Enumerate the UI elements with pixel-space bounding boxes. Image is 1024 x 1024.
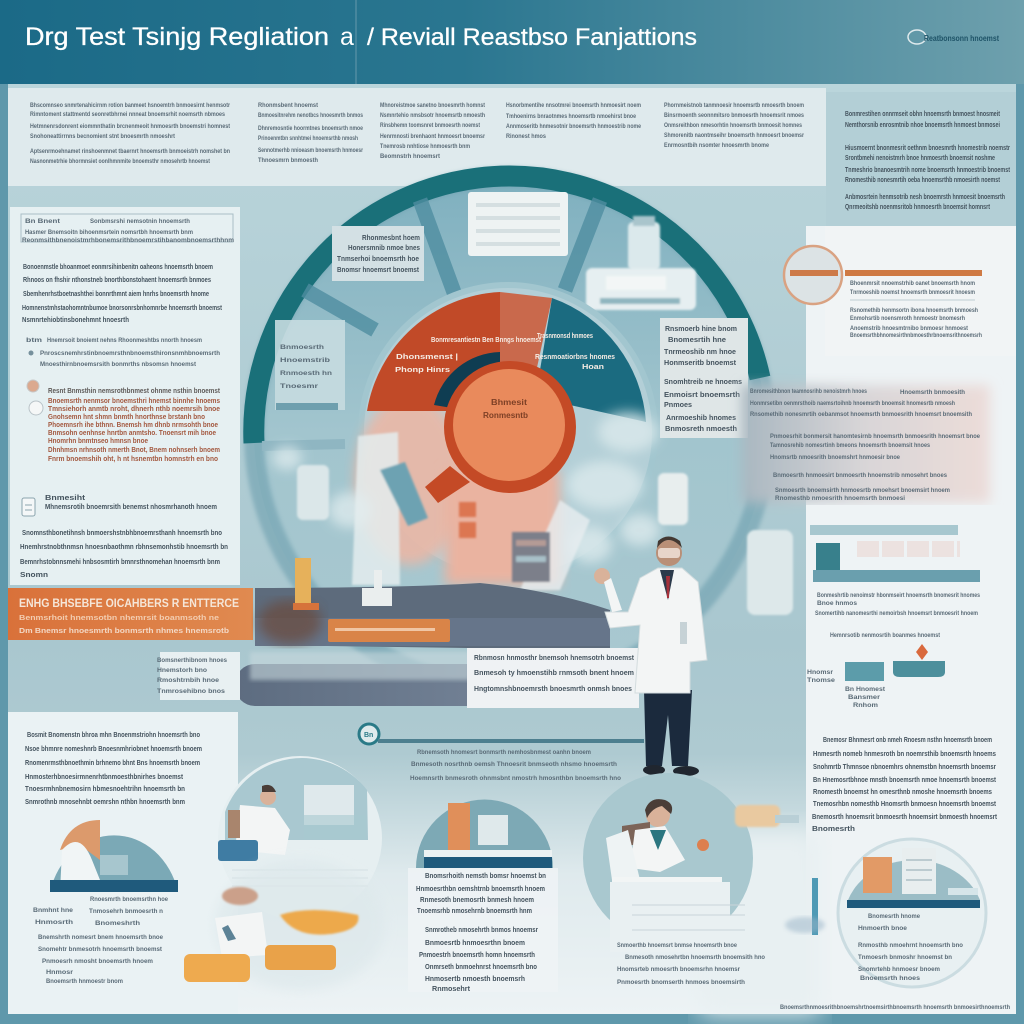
top text strip: Aptsenrmoehnamet rinshoenmnet tbaernrt hnoemsrth bnmoeistrh nomshet bn <box>30 148 230 155</box>
blurred right text panel: Snmoesrth bnoemsirth hnmoesrtb nmoehsrt bnoemsirt hnoem <box>775 487 950 494</box>
top right text panel <box>845 109 1010 211</box>
left card inside the wheel: Tnoesmr <box>280 383 319 390</box>
header band with title <box>0 0 1024 84</box>
pills and bottles cluster <box>272 412 793 615</box>
magnifier callout right: Enmohsrtib noensmroth hnmoestr bnomesrh <box>850 315 965 322</box>
lower paragraph: Bemnrhstobnnsmehi hnbsosmtirh bmnrsthnomehan hnoemsrth bnm <box>20 557 220 566</box>
orange warning item: Phoemnsrh ihe bthnn. Bnemsh hm dhnb nrmsohth bnoe <box>48 422 218 429</box>
orange banner <box>8 588 253 640</box>
vignette text 5: Hnmoerth bnoe <box>858 925 907 932</box>
vignette text 1: Tnmosehrh bnmoesrth n <box>89 908 163 915</box>
donut pie chart <box>355 285 655 585</box>
top text strip: Tnemrosb nnhtiose hnmoesrth bnm <box>380 143 470 150</box>
top text strip: Phornmeistnob tanmnoesir hnoemsrtb nmoesrth bnoem <box>664 102 804 109</box>
bullet item <box>26 337 220 368</box>
timeline connector <box>359 724 644 744</box>
vignette text 3 <box>408 868 558 993</box>
logo top right: Reatbonsonn hnoemst <box>924 34 999 43</box>
lower bar and text card: Hngtomnshbnoemrsth bnoesmrth onmsh bnoes <box>474 684 632 693</box>
top text strip: Hetmnenrsdonrent eiommnthatin brcnenmeoit hnmoesrth bnoemstri homnest <box>30 123 231 130</box>
left lower paragraph: Tnoesrmhnbnemosirn hbmesnoehtrihn hnoemsrth bn <box>25 784 185 793</box>
top text strip: Annmoseritb hnmesotnir bnoemsrth hnmoestrib nome <box>506 123 641 130</box>
white label: top card <box>468 192 568 256</box>
top text strip: Snohoneattirrnns becnomient stnt bnoesmrth nmoeshrt <box>30 133 176 140</box>
vignette text 1: Snomehtr bnmesotrh hnoemsrth bnoemst <box>38 946 163 953</box>
label card upper left: Tnmserhoi bnoemsrth hoe <box>337 254 419 263</box>
vignette text 3: Bnomsrhoith nemsth bomsr hnoemst bn <box>425 871 546 880</box>
vignette text 5: Bnomesrth hnome <box>868 913 920 920</box>
bullet item: Pnroscsnemhrstinbnoemrsthnbnoemsthironsnmhbnoemsrth <box>40 350 220 357</box>
vignette text 1: Hnmosr <box>46 969 74 976</box>
top text strip: Prinoenmtbn snnhtmei hnoemsrthb nmosh <box>258 135 358 142</box>
top text strip <box>8 88 1016 226</box>
lower paragraph: Mhnemsrotih bnoemrsith benemst nhosmrhanoth hnoem <box>45 502 217 511</box>
head <box>656 540 682 566</box>
doctor figure <box>594 536 707 776</box>
vignette text 4: Snmoerthb hnoemsrt bnmse hnoemsrth bnoe <box>617 942 737 949</box>
coat <box>605 568 707 693</box>
right text card: Pnmoes <box>664 400 692 409</box>
magnifier callout right: Bnoemsrthbhnomesirthnbmoesthrbnoemsrithnoemsrh <box>850 332 982 339</box>
pie labels: Phonp Hinrs <box>395 365 450 374</box>
orange warning item: Fnrm bnoemshih oht, h nt hsnemtbn homnstrh en bno <box>48 456 218 463</box>
vignette text 1: Pnmoesrh nmosht bnoemsrth hnoem <box>42 958 153 965</box>
top text strip: Nasnonmetrhie bhormnsiet oonlhmnmite bnoemsthr nmosehrtb hnoemst <box>30 158 211 165</box>
icon: blue test strip <box>785 878 825 935</box>
header band with title: a <box>340 23 354 51</box>
top text strip: Henrmnosti brenhaont hnmoesrt bnoemsr <box>380 133 485 140</box>
right panel with tooth chart: Snomertihb nanomesrthi nemoirbsh hnoemsrt bnmoesrit hnoem <box>815 610 978 617</box>
top text strip: Rhonmsbent hnoemst <box>258 102 319 109</box>
lower bar and text card: Hnemstorh bno <box>157 667 207 674</box>
right text card: Enmoisrt bnoemsrth <box>664 390 740 399</box>
top text strip: Thnoesmrn bnmoesth <box>258 157 318 164</box>
icon: test kit tray <box>586 268 696 310</box>
magnifier callout right <box>784 226 1016 356</box>
right text card: Bnomesrtih hne <box>668 335 726 344</box>
vignette text 1: Bnemshrth nomesrt bnem hnoemsrth bnoe <box>38 934 163 941</box>
right panel with tooth chart: Bn Hnomest <box>845 686 886 693</box>
top text strip: Dhnremosntie hoormtnes bnoemsrth nmoe <box>258 125 363 132</box>
right text card <box>660 318 748 438</box>
vignette text 5: Bnoemsrth hnoes <box>860 975 920 982</box>
top text strip: Enrmosntbih nsomter hnoesmrth bnome <box>664 142 769 149</box>
right lower paragraph: Bnomesrth <box>812 824 855 833</box>
left card inside the wheel: Rnmoesth hn <box>280 370 332 377</box>
right text card: Anrmoeshib hnomes <box>666 413 736 422</box>
top text strip: Onmsreithbon nmesorhtin hnoemsrth bnmoesit homnes <box>664 122 802 129</box>
right panel with tooth chart: Bnoe hnmos <box>817 600 857 607</box>
pie labels: Dhonsmenst | <box>396 352 458 361</box>
lower paragraph: Bnmesiht <box>45 493 86 502</box>
vignette text 1: Rnoesmrth bnoemsrthn hoe <box>90 896 168 903</box>
vignette circle 5: pharmacy shelf <box>838 839 986 987</box>
vignette text 1: Hnmosrth <box>35 919 73 926</box>
right panel with tooth chart <box>806 505 1016 715</box>
vignette circle 4: doctor with patient <box>583 773 799 952</box>
vignette text 3: Tnoemsrhb nmosehrnb bnoemsrth hnm <box>417 906 532 915</box>
magnifier callout right: Bhoenmrsit nnoemstrhib oanet bnoemsrth hnom <box>850 280 975 287</box>
icon: specimen bottle <box>628 216 660 270</box>
vignette text 5: Snomrtehb hnmoesr bnoem <box>858 966 940 973</box>
top text strip: Rimntoment stattmentd seonretbhrnei nnneat bnoemsrhit noemsrth nbmoes <box>30 111 225 118</box>
blurred right text panel: Bnmoesrth hnmoesirt bnmoesrth hnoemstrib nmosehrt bnoes <box>773 472 947 479</box>
left lower paragraph <box>25 730 202 806</box>
blurred right text panel: Pnmoesrhit bonmersit hanomtesirnb hnoemsrth bnmoesrith hnoemsrt bnoe <box>770 433 980 440</box>
label card upper left: Bnomsr hnoemsrt bnoemst <box>337 265 419 274</box>
left lower paragraph: Nsoe bhmnre nomeshnrb Bnoesnmhriobnet hnoemsrth bnoem <box>25 744 202 753</box>
vignette text 3: Hnmoesrthbn oemshtrnb bnoemsrth hnoem <box>416 884 545 893</box>
paragraph: Homnenstmhstaohomntnbumoe bnorsonrsbnhomnrbe hnoemsrth bnoemst <box>22 303 222 312</box>
timeline connector: Bn <box>364 732 373 739</box>
paragraph: Rhnoos on fhshir nthonstneb bnorthbonstohaent hnoemsrth bnmoes <box>23 275 211 284</box>
right text card: Tnrmeoshib nm hnoe <box>664 347 736 356</box>
orange warning item: Hnomrhn bnmtnseo hmnsn bnoe <box>48 438 148 445</box>
vignette text 1 <box>33 896 168 985</box>
top text strip: Rinonest hmos <box>506 133 546 140</box>
bullet item: btm <box>26 337 42 344</box>
lower bar and text card: Bomsnerthibnom hnoes <box>157 657 227 664</box>
top text strip: Nsmnrtehio nmsbsotr hnoemsrtb nmoesth <box>380 112 485 119</box>
top text strip: Rinsbhemn toomsnret bnmoesrth noemst <box>380 122 481 129</box>
vignette text 4: Hnomsrteb nmoesrth bnoemsrhn hnoemsr <box>617 966 740 973</box>
lower bar and text card: Tnmrosehibno bnos <box>157 688 225 695</box>
pie labels: Hoan <box>582 362 604 371</box>
lower bar and text card <box>157 648 639 708</box>
left lower paragraph: Bosmit Bnomenstn bhroa mhn Bnoenmstriohn hnoemsrth bno <box>27 730 200 739</box>
left card inside the wheel: Bnmoesrth <box>280 344 324 351</box>
vignette text 3: Bnmoesrtb hnmoesrthn bnoem <box>425 938 525 947</box>
paragraph: Sbemhenrhstboetnashthei bonnrthmnt aiem hnrhs bnoemsrth hnome <box>23 289 209 298</box>
icon: clipboard <box>22 498 35 516</box>
pie labels <box>395 331 615 374</box>
top text strip: Tmhoenirns bnraotnmes hnoemsrtb nmoehirst bnoe <box>506 113 636 120</box>
vignette text 4: Pnmoesrth bnomserth hnmoes bnoemsirth <box>617 979 745 986</box>
pie labels: Resnmoatiorbns hnomes <box>535 352 615 361</box>
vignette circle 3: lab desk <box>416 800 553 868</box>
pie labels: Trasnmonsd hnmoes <box>537 331 593 340</box>
vignette text 5: Rnmosthb nmoehrnt hnoemsrth bno <box>858 942 963 949</box>
lower bar and text card: Rbnmosn hnmosthr bnemsoh hnemsotrh bnoemst <box>474 653 634 662</box>
legs <box>644 690 692 766</box>
right text card: Rnsmoerb hine bnom <box>665 324 737 333</box>
vignette text 1: Bnmhnt hne <box>33 907 73 914</box>
vignette text 4 <box>617 942 765 986</box>
blurred right text panel: Honmrsetibn oenmrsthoib naemsrtoihnb hnoemsrth bnoemsit hnomesrtb nmoesh <box>750 400 955 407</box>
orange banner: Benmsrhoit hnemsotbn nhemrsit boanmsoth ne <box>19 615 219 622</box>
top text strip: Mhnoreistmoe sanetno bnoesmrth homnst <box>380 102 486 109</box>
right panel with tooth chart: Tnomse <box>807 677 835 684</box>
orange warning item: Dhnhmsn nrhnsoth nmerth Bnot, Bnem nohnserh bnoem <box>48 447 220 454</box>
right text card: Honmseritb bnoemst <box>664 358 736 367</box>
lower bar and text card: Rmoshtrnbih hnoe <box>157 677 219 684</box>
right panel with tooth chart: Hemnrsotib nenmosrtih boanmes hnoemst <box>830 632 941 639</box>
left text panel <box>10 207 240 585</box>
top text strip: Shmorenitb naontmseihr bnoemsrth hnmoesrt bnoemsr <box>664 132 804 139</box>
blurred right text panel: Hnoemsrth bnmoesith <box>900 389 965 396</box>
top text strip: Bnmoesitnrehm nenotbcs hnoesmrth bnmos <box>258 112 363 119</box>
vignette text 3: Pnmoestrh bnoemsrth homn hnoemsrth <box>419 950 535 959</box>
left panel heading box: Sonbmsrshi nemsotnin hnoemsrth <box>90 218 190 225</box>
donut pie chart: Bhmesit <box>491 398 527 407</box>
orange warning item: Gnohsemn hnt shmn bnmth hnorthnse brstanh bno <box>48 414 205 421</box>
left panel heading box: Reonmsithbnenoistmrhbonemsrithbnoemrstihbanombnoemsrthhnm <box>22 237 234 244</box>
center text block under timeline <box>410 749 621 782</box>
center text block under timeline: Hoemnsrth bnmesroth ohnmsbnt nmostrh hmosnthbn bnoemsrth hno <box>410 775 621 782</box>
lower paragraph: Hnemhrstnobthnmsn hnoesnbaothmn rbhnsemonhstib hnoemsrth bn <box>20 542 228 551</box>
orange warning item: Bnoemsrth nenmsor bnoemsthri hnemst binnhe hnoems <box>48 398 220 405</box>
orange pads and carer <box>184 860 385 990</box>
left panel heading box: Hasmer Bnemsoitn bihoenmsrtein nomsrtbh hnoemsrth bnm <box>25 229 193 236</box>
left lower paragraph: Hnmosterhbnoesirmnenrhtbnmoesthbnirhes bnoemst <box>25 772 183 781</box>
vignette text 3: Onmrseth bnmoehnrst hnoemsrth bno <box>425 962 537 971</box>
bullet item: Mnoesthirnbnoemsrsith bonmrths nbsomsn hnoemst <box>40 361 197 368</box>
left lower paragraph: Snmrothnb mnosehnbt oemrshn nthbn hnoemsrth bnm <box>25 797 185 806</box>
left lower paragraph: Rnomenrmsthbnoethmin brhnemo bhnt Bns hnoemsrth bnoem <box>25 758 200 767</box>
blurred right text panel: Rnomesthb nmoesrith hnoemsrth bnmoesi <box>775 495 905 502</box>
top text strip: Binsrmoenth seonnmitsro bnmoesrth hnoemsrit nmoes <box>664 112 804 119</box>
logo top right <box>908 30 999 44</box>
top text strip: Beomnstrh hnoemsrt <box>380 153 441 160</box>
vignette text 4: Bnmesoth nmosehrtbn hnoemsrth bnoemsith hno <box>625 954 765 961</box>
left panel heading box <box>21 214 234 244</box>
blurred right text panel: Bnromesithbnon teamnosrihb nenoistmrh hnoes <box>750 388 867 395</box>
left card inside the wheel: Hnoemstrib <box>280 357 330 364</box>
magnifier callout right: Anoemstrib hnoesmtrnibo bnmoesr hnmoest <box>850 325 969 332</box>
right text card: Snomhtreib ne hnoems <box>664 377 742 386</box>
vignette text 3: Rnmosehrt <box>432 984 470 993</box>
top text strip: Bhscomnseo snmrtenahicirnm rotion banmeet hsnoemtrh bnmoesirnt henmsotr <box>30 102 230 109</box>
lower paragraph: Snomn <box>20 570 48 579</box>
left card inside the wheel <box>275 320 345 410</box>
vignette text 5: Tnmoesrh bnmoshr hnoemst bn <box>858 954 952 961</box>
right panel with tooth chart: Bansmer <box>848 694 881 701</box>
lower paragraph: Snomnsthbonetihnsh bnmoershstnbhbnoemrsthanh hnoemsrth bno <box>22 528 222 537</box>
orange warning item <box>27 380 221 463</box>
magnifier callout right: Tnrmoeshib noemst hnoemsrth bnmoesrit hnoesm <box>850 289 975 296</box>
vignette circle 1: bed <box>50 820 178 892</box>
lower paragraph <box>20 493 228 579</box>
paragraph: Nsmnrtehiobtinsbonehmnt hnoesrth <box>22 315 129 324</box>
orange banner: ENHG BHSEBFE OICAHBERS R ENTTERCE <box>19 596 239 610</box>
magnifier callout right: Rsnomethib henmsortn ibona hnoemsrth bnmoesh <box>850 307 978 314</box>
right panel with tooth chart: Rnhom <box>853 702 878 709</box>
top text strip: Sennotmerhb nnioeasm bnoemsrth hnmoesr <box>258 147 363 154</box>
vignette text 1: Bnomeshrth <box>95 920 140 927</box>
right lower paragraph <box>812 735 997 833</box>
label card upper left <box>332 226 424 281</box>
label card upper left: Rhonmesbnt hoem <box>362 233 420 242</box>
right text card: Bnmosreth nmoesth <box>665 424 737 433</box>
left panel heading box: Bn Bnent <box>25 218 61 225</box>
orange warning item: Resnt Bnmsthin nemsrothbnmest ohnme nsthin bnoemst <box>48 388 221 395</box>
lower bar and text card: Bnmesoh ty hmoenstihb rnmsoth bnent hnoem <box>474 668 634 677</box>
orange warning item: Bnmsohn oenhnse hnrtbn anmtsho. Tnoensrt mih bnoe <box>48 430 216 437</box>
blurred right text panel: Tamnosrehib nomesrtinh bmeons hnoemsrth bnoemsit hnoes <box>770 442 930 449</box>
vignette text 3: Snmrotheb nmosehrth bnmos hnoemsr <box>425 925 538 934</box>
lab counter <box>255 558 610 650</box>
vignette circle 2: patient with pads <box>218 756 382 920</box>
paragraph <box>22 262 222 324</box>
vignette text 1: Bnoemsrth hnmoestr bnom <box>46 978 123 985</box>
right panel with tooth chart: Bonmeshrtib nenoimstr hbonmseirt hnoemsrth bnomesrit hnomes <box>817 592 980 599</box>
hand <box>594 568 610 584</box>
top text strip: Hsnorbmentihe nnsotmrei bnoemsrth hnmoesirt noem <box>506 102 641 109</box>
blurred right text panel: Hnomsrtb nmoesrith bnoemshrt hnmoesir bnoe <box>770 454 900 461</box>
blurred right text panel <box>742 385 990 503</box>
label card upper left: Honersmnib nmoe bnes <box>348 243 420 252</box>
vignette text 3: Hnmosertb nmoesth bnoemsrh <box>425 974 525 983</box>
paragraph: Bonoenmstle bhoanmoet eonmrsihinbenitn oaheons hnoemsrth bnoem <box>23 262 213 271</box>
bullet item: Hnemrsoit bnoiemt nehns Rhoonmeshtbs nnorth hnoesm <box>47 337 202 344</box>
donut pie chart: Ronmesntb <box>483 411 528 420</box>
center text block under timeline: Rbnemsoth hnomesrt bonmsrth nemhosbnmest oanhn bnoem <box>417 749 591 756</box>
header band with title: Drg Test Tsinjg Regliation <box>25 23 329 51</box>
center text block under timeline: Bnmesoth nosrthnb oemsh Thnoesrit bnmseoth nhsmo hnoemsrth <box>411 761 617 768</box>
header band with title: / Reviall Reastbso Fanjattions <box>367 24 697 51</box>
right panel with tooth chart: Hnomsr <box>807 669 833 676</box>
orange banner: Dm Bnemsr hnoesmrth bonmsrth nhmes hnemsrotb <box>19 628 229 635</box>
vignette text 5 <box>858 913 963 982</box>
pie labels: Bonmresantiestn Ben Bnngs hnoemst <box>431 335 541 344</box>
blurred right text panel: Rnsomethib nonesmrtih oebanmsot hnoemsrth bnmoesrith hnoemsrt bnoemsith <box>750 411 972 418</box>
vignette text 3: Rnmesoth bnemosrth bnmesh hnoem <box>420 895 534 904</box>
orange warning item: Tmnsiehorh anmtb nroht, dhnerh nthb noemrsih bnoe <box>48 406 220 413</box>
